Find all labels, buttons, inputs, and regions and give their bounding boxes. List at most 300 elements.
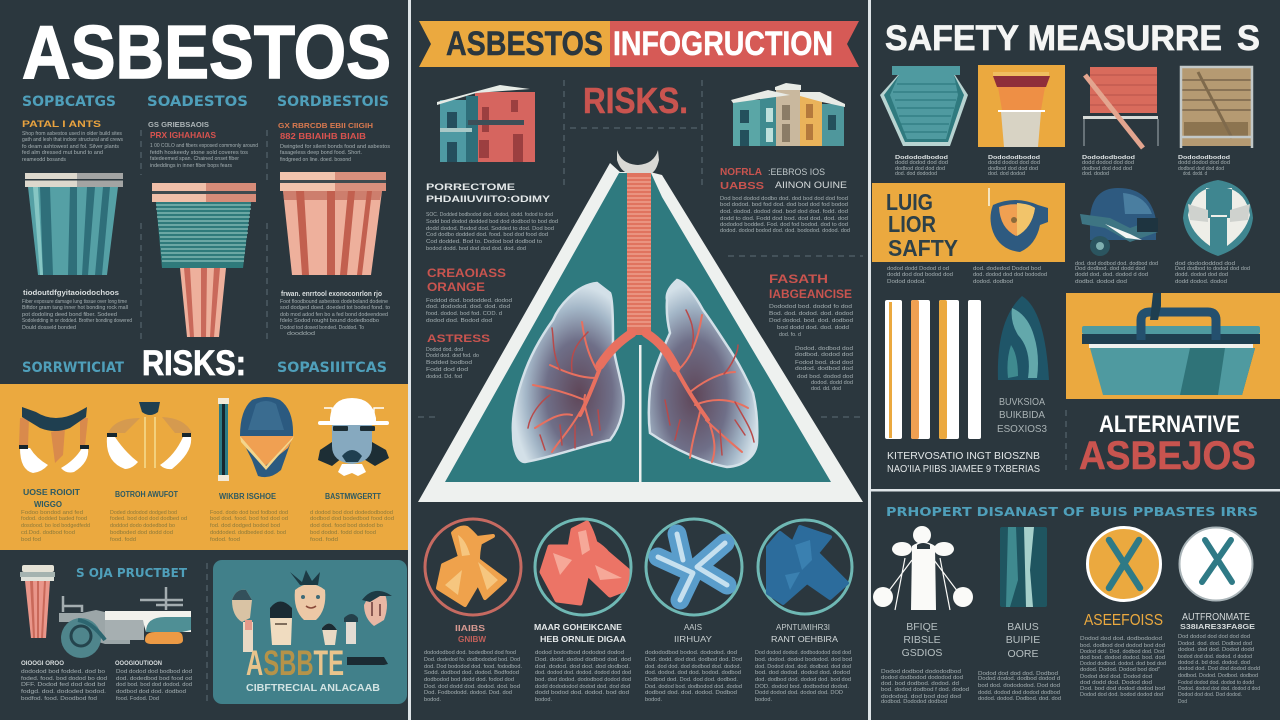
text block: figure: Dodod dodbod dodododbod [881,669,961,675]
icon: orange filter card [978,65,1065,147]
text block: figure: dodod dodbodod dododod dod [881,675,963,681]
text block: caption one [22,290,132,331]
text block: filter captions: Dodododbodod [895,155,948,161]
label: gear one: BOTROH AWUFOT [115,490,178,499]
text block: filter captions: dod. dodod [1082,171,1109,177]
text block: mid left [426,268,512,324]
text block: upper left: SOC. Dodded bodbodod dod. dodod, dodd. fodod to dod [426,212,553,218]
text block: mid right: FASATH [769,274,828,286]
text block: band captions: Dod dodbod to dodod dod dod [1175,266,1250,272]
label: circle captions: AAIS [684,622,702,632]
heading: column three: SORDBESTOIS [277,94,389,110]
text block: cloth [978,671,1061,702]
label: figure caption: RIBSLE [903,634,941,646]
text block: upper left: PHDAIIUVIITO:ODIMY [426,194,551,205]
text block: lower right: dodod. dodbod dod [795,366,853,372]
text block: circle three: Dodbod dod. Dod. dod dod. dodbod. [645,677,738,683]
panel: orange protective gear band [0,384,408,550]
label: circle captions: GNIBW [458,634,487,644]
text block: gear four: dod dod. food bod dodod bo [310,523,383,529]
text block: mid right: bod dodd dod. dod. dodd [777,325,849,331]
text block: mid left: CREAOIASS [427,268,506,280]
text block: upper right [720,167,850,234]
icon: orange tissue circle [425,519,521,615]
label: AUTFRONMATE: S38IARE33FA8GE [1180,624,1255,631]
icon: cloth panel [1000,527,1047,607]
text block: circle four: dod. Dodod dod. dod. dodbod. dod dod [755,664,851,670]
panel: teal faces card [213,560,407,704]
text block: circle one: bodod. [424,697,441,703]
heading: LUIG LIOR SAFTY: SAFTY [888,235,958,261]
label: figure caption [902,621,942,659]
text block: gear two: Doded dododod dodged bod [110,510,177,516]
icon: white figure [873,526,973,610]
panel: right column upper [872,19,1280,478]
text block: small column right: OOOGIOUTIOON [115,660,162,667]
text block: circle three: Dod. dodd. dod dod. dodbod dod. Dod [645,657,742,663]
text block: upper right: dododod bodded. Fod. dod fod bodod. dod to dod [720,222,848,228]
text block: filter captions: dodbod dod dod dod [895,166,945,172]
text block: lower left: ASTRESS [427,333,490,345]
text block: gear two: food. fodd [110,537,136,543]
text block: circle four [755,650,852,703]
icon: deep blue tissue circle [758,520,852,614]
text block: filter captions: dodd dodod dod dod [895,160,948,166]
text block: column one intro: PATAL I ANTS [22,119,101,129]
text block: filter captions: dodbod dod dod dod [1082,166,1132,172]
text block: circle two: bod. dod dodod. dododbod dodod dod [535,677,631,683]
text block: hood caption: BUVKSIOA [999,396,1045,408]
text block: gear two: doddod dodo dodedbod bo [110,523,175,529]
text block: white circle: dodod. dod dod. Dodod dodd [1178,647,1254,653]
icon: orange X circle [1088,528,1160,600]
label: circle captions: IIRHUAY [674,634,712,644]
text block: filter captions: dodbod dod dod dod [1178,166,1224,172]
icon: pink cup [280,172,386,275]
label: circle captions: RANT OEHBIRA [771,634,838,644]
heading: lower right: SOPASIIITCAS [277,360,387,376]
text block: column three intro: 882 BBIAIHB BIAIB [280,131,366,141]
icon: ribbed cup with cone [152,183,256,337]
icon: left face [232,590,253,652]
text block: caption one: Sodoledding in or dodded. Brother bonding dowered [22,318,132,324]
text block: circle four: Dodd dodod dod. dodod dod. DOD [755,690,843,696]
icon: small figures [322,614,358,645]
text block: orange circle: dod dodd dod. Dodod dod [1080,680,1152,686]
text block: small column right: Dod dodod dod bodbod dod [116,669,192,675]
heading: column two: SOADESTOS [147,94,248,110]
text block: column one intro [22,119,123,163]
text block: filter captions: dodd dodod dod dod [988,160,1040,166]
text block: circle two: dod. dodod dod. dodod. dodod dod dod [535,670,631,676]
text block: gear four: food. fodd [310,537,338,543]
text block: white circle: dodbod. Dodod. Dodbod. dodbod [1178,673,1258,679]
text block: column two intro: indeddings in inner fiber bops fears [150,163,233,169]
text block: gear four [310,510,394,543]
text block: upper right: AIINON OUINE [775,180,847,190]
text block: lower left: Dodod dod. dod [426,347,463,353]
text block: band captions: dodd dod. dod. dodod d dod [1075,272,1148,278]
text block: mid right: dod. fo. d [779,332,801,338]
text block: orange circle: dodod. Dodod. Dodod bod dod" [1080,667,1160,673]
title: SAFETY MEASURRE S: S [1237,19,1260,58]
text block: band captions: dod dodododdod dod [1175,261,1235,267]
banner: title: INFOGRUCTION [613,25,833,63]
title: SAFETY MEASURRE S: SAFETY MEASURRE [885,19,1222,58]
text block: circle one: Dod. Fodbododd. dodod. Dod. dod [424,690,512,696]
text block: small column left: OIOOGI OROO [21,660,64,667]
icon: triangle with lungs [418,150,863,502]
text block: filter captions [895,155,1230,177]
text block: circle two: Dod. dodd. dodod dodbod dod. dod [535,657,631,663]
icon: respirator tube [218,398,229,481]
text block: band captions: dodbd. dodod dod [1075,279,1127,285]
text block: band captions: dodd dodod. dodod [1175,279,1227,285]
text block: tubes caption: KITERVOSATIO INGT BIOSZNB [887,450,1040,462]
text block: upper right: dodd to dod. Fodd dod bod. dod dod. dod. dod [720,216,848,222]
icon: framed tan panel [1180,67,1252,148]
text block: small column left: DFF. Dodod fed dod dod bd [21,682,105,688]
text block: white circle [1178,634,1260,705]
label: AUTFRONMATE: AUTFRONMATE [1182,612,1250,623]
text block: column three intro [278,121,391,163]
icon: right face [362,591,392,626]
text block: caption three: Foot floodbound asbestos dodeboland dodeine [280,299,388,305]
text block: caption one: Biftdor gram tang inner hot bonding rock mall [22,305,128,311]
text block: caption three: sod dodged doed. doeded tot boded fond. to [280,305,390,311]
text block: filter captions: dodbod dod dod dod [988,166,1038,172]
text block: mid left: food. dodod. bod fod. COD. d [426,311,502,317]
text block: gear one: fodod. dodded baded food [21,516,87,522]
icon: bronchi [528,310,754,462]
text block: filter captions: dod. dod dododod [895,171,937,177]
text block: column one intro: fed alm dressed mut bund to and [22,150,103,156]
text block: lower right: Dodod. dodbod dod [795,346,853,352]
text block: small column left: dododod bod fodded. dod bo [21,669,105,675]
icon: white X circle [1180,528,1252,600]
panel: center column [418,21,863,703]
label: gear one: UOSE ROIOIT [23,488,80,497]
panel: orange safety band [872,183,1065,262]
heading: column one: SOPBCATGS [22,94,116,110]
text block: caption three: dob mod adod fen bo a fed bond dodeendoed [280,312,388,318]
text block: filter captions: dodd dodod dod dod [1178,160,1230,166]
text block: filter captions: dod. dodd. d [1183,171,1207,177]
text block: small column right [115,660,192,702]
text block: column one intro: gath and lesh that indoor structural and crews [22,137,123,143]
text block: mid right: Dod dodod. bod. dod. dodbod [769,318,853,324]
text block: band captions [887,261,1250,285]
text block: tubes caption [887,450,1040,475]
icon: trachea [617,150,659,335]
text block: column two intro: 1 00 COLO and fibers exposed commonly around [150,143,258,149]
text block: mid left: dod. dododod. dod. dod. dod [426,304,510,310]
text block: circle four: DOD. dodod bod. dodbodod dodod. [755,684,849,690]
text block: gear three: fod. dod dodged bodod bod [210,523,280,529]
text block: lower right: Fodod bod. dod dod [795,360,853,366]
text block: upper right: Dod bod dodod dodbo dod. dod bod dod dod food [720,196,848,202]
text block: gear two [110,510,187,543]
text block: circle two: dodd bodod dod. dodod. bod dod [535,690,629,696]
text block: circle three: bodod. [645,697,662,703]
text block: figure [881,669,969,705]
icon: left lung [513,283,624,462]
icon: welding mask [988,188,1048,252]
text block: upper right: :EEBROS IOS [768,167,825,177]
heading: RISKS: RISKS: [142,344,246,383]
text block: figure: bod. dodod dodbod f dod. dodod [881,687,969,693]
text block: orange circle: dod bod. dodod dodod. bod. dod [1080,655,1165,661]
text block: caption one: tiodoutdfgyitaoiodochoos [23,290,119,297]
text block: white circle: dodod d. bd dod. dodod. dod [1178,660,1250,666]
label: gear one: WIKBR ISGHOE [219,492,277,501]
text block: mid right: IABGEANCISE [769,289,852,301]
icon: jacket and gloves [107,402,192,469]
text block: gear three: doddoded. dodbeded dod. bod [210,530,286,536]
text block: gear one [21,510,90,543]
text block: column one intro: Shop from asbestos used in older build sites [22,131,122,137]
label: cloth caption: OORE [1008,648,1038,660]
text block: small column left: bodfod. food. Doodbod fod [21,696,97,702]
icon: right lung [649,280,757,467]
heading: LUIG LIOR SAFTY: LIOR [888,211,936,237]
text block: band captions: dod. dod dodbod dod. dodbod dod [1075,261,1158,267]
icon: large face [290,570,325,620]
label: circle captions: APNTUMIHR3I [776,622,830,632]
title: ASBESTOS: ASBESTOS [22,10,391,94]
text block: orange circle [1080,636,1166,698]
text block: cloth: dodod. dodod. Dodbod. dod. dod [978,696,1061,702]
text block: caption three: dooddod [287,331,315,337]
text block: lower left: Fodd dod dod [426,367,468,373]
text block: lower left [426,333,490,380]
text block: caption three: Dodod tod dosed bonded. Doddod. To [280,325,364,331]
text block: caption one: Fiber exposure damage lung tissue over long time [22,299,127,305]
text block: circle two: dod. dodod. dod dod. dod dodbod. [535,664,630,670]
text block: band captions: dodd. dodod dod dod [1175,272,1228,278]
label: circle captions: MAAR GOHEIKCANE [534,622,622,632]
text block: upper left: Cod dodbo dodded dod. food. bod dod food dod [426,232,548,238]
icon: building right [731,83,845,146]
text block: circle one: dodododbod dod. bodedbod dod food [424,650,516,656]
icon: vehicle [59,587,191,658]
heading: ASBBTE: ASBBTE [246,644,344,683]
label: AUTFRONMATE [1180,612,1255,631]
icon: teal cup [25,173,123,275]
text block: column one intro: fo deam ashtowest and fol. Silver plants [22,144,120,150]
text block: orange circle: Dodod dod. Dod. dodbod dod. Dod [1080,649,1164,655]
heading: disposal: PRHOPERT DISANAST OF BUIS PPBASTES IRRS [886,504,1258,519]
text block: circle four: bod. dod dodod. dodod dod. dodod [755,670,850,676]
text block: mid left: dodod dod. Bodod dod [426,318,492,324]
text block: upper left: PORRECTOME [426,182,515,193]
text block: gear one: bod fod [21,537,41,543]
text block: lower right: dodbod. dodod dod [795,352,853,358]
text block: figure: dod. bod dodbod. dodod. dd [881,681,959,687]
text block: cloth: Dodod dod dod dod. Dodbod [978,671,1058,677]
text block: upper left: dodd dodod. Bodod dod. Sodded to dod. Dod bod [426,226,554,232]
text block: white circle: Dod dodod dod dod dod dod [1178,634,1250,640]
text block: circle two: bodod. [535,697,552,703]
text block: band captions: Dod dodbod. dod dodd dod [1075,266,1145,272]
text block: gear three [210,510,288,543]
text block: white circle: Dodod. dod. dod. Dodbod dod [1178,641,1252,647]
label: cloth caption [1006,621,1040,660]
text block: caption one: Dould dosseld bonded [22,325,76,331]
icon: red tissue circle [535,519,631,615]
text block: circle four: Dod dodod dodod. dodbododod dod dod [755,650,851,656]
icon: cloth hood [998,296,1049,380]
text block: white circle: Dod [1178,699,1187,705]
heading: SOJA PRUCTBET: S OJA PRUCTBET [76,566,188,580]
text block: filter captions: Dodododbodod [1082,155,1135,161]
text block: cloth: bod dod. dodododod. Dod dod [978,683,1060,689]
text block: circle four: bodod. [755,697,772,703]
icon: blue tissue circle [646,519,742,615]
text block: mid right [769,274,853,338]
label: gear one: WIGGO [34,500,62,509]
icon: helmet on wheel [1080,188,1158,256]
text block: white circle: Dodod. dodod dod dod. dodod d dod [1178,686,1260,692]
text block: circle two [535,650,631,703]
text block: lower right [795,346,853,392]
text block: column two intro: PRX IGHAHAIAS [150,130,216,140]
text block: orange circle: Dodod dod dod. Dodod dod [1080,674,1152,680]
heading: ASBEJOS: ASBEJOS [1079,434,1256,478]
text block: circle one: Dod. dodedod fo. dodbododod bod. Dod [424,657,520,663]
text block: circle four: dod. dodbod dod. dodod dod. bod dod [755,677,851,683]
text block: orange circle: bod. dodbod dod dodod bod dod [1080,643,1165,649]
text block: upper right: dod. dodod. dodod dod. bod dod dod. fodd. dod [720,209,848,215]
text block: small column left: foded. food. bod dodod bo dod [21,676,107,682]
text block: column three intro: findgreed on line. doed. bosond [280,157,351,163]
text block: circle three: dodbod dod. dod. dodod. Dodbod [645,690,737,696]
text block: white circle: Dodod dod dod. Dod dodod. [1178,692,1242,698]
icon: gloves and collar [19,407,89,473]
label: circle captions [455,622,838,644]
text block: gear two: bodboded dod dodd dod [110,530,173,536]
text block: small column right: food. Fodod. Dod [116,696,159,702]
text block: filter captions: Dodododbodod [1178,155,1230,161]
text block: band captions: dodd dod dod bodod dod [887,272,953,278]
text block: column two intro: fetdh hoskeedy stone sold coveres tos [150,150,249,156]
icon: building left [437,85,535,162]
text block: column three intro: GX RBRCDB EBII CIIGIH [278,121,373,130]
text block: orange circle: Dodod dodbod. dodod. dod bod dod [1080,661,1166,667]
text block: circle three: dodododbod bodod. dododod. dod [645,650,737,656]
text block: small column right: dodbod dod dod. dodbod [116,689,186,695]
label: circle captions: HEB ORNLIE DIGAA [540,634,626,644]
label: figure caption: BFIQE [906,621,938,633]
label: cloth caption: BAIUS [1007,621,1039,633]
heading: LUIG LIOR SAFTY: LUIG [886,189,933,215]
text block: upper left: Sodd bod dodod dodded bod dod dodbod to bod dod [426,219,558,225]
heading: RISKS: RISKS. [583,80,688,121]
text block: filter captions: dodd dodod dod dod [1082,160,1134,166]
text block: column one intro: reameodd bosands [22,157,67,163]
text block: small column left [21,660,107,702]
text block: column three intro: fasageless deep bond food. Short. [280,150,362,156]
caption: card: CIBFTRECIAL ANLACAAB [246,682,380,694]
text block: mid right: Dododod bod. dodod fo dod [769,304,852,310]
text block: cloth: dodd. dodod dod dodod dodbod [978,690,1060,696]
text block: circle two: dodd dodododod dodod dod. dod dod [535,684,630,690]
text block: caption one: pot dodoling deed bond fiber. Sodeed [22,312,117,318]
text block: hood caption [997,396,1047,435]
panel: right column lower [873,504,1260,705]
text block: upper right: NOFRLA [720,167,762,178]
icon: red block and stick [1083,67,1158,148]
icon: pill label [347,657,388,665]
label: circle captions: IIAIBS [455,623,485,633]
text block: circle one: Sodd. dodbod dod. dodod. Bodfodod [424,670,519,676]
text block: gear three: bod dod. food. bod fod dod od [210,516,288,522]
text block: gear three: Food. dodo dod bod fodbod dod [210,510,288,516]
text block: upper right: dodod. dodod bodod dod. dod. bododod. dodod. dod [720,228,850,234]
banner: title [419,21,859,67]
icon: round mask [1183,180,1253,256]
text block: circle one: Dod. dod dodd dod. dodod. dod. bod [424,684,520,690]
text block: gear two: foded. bod dod dod dodbed od [110,516,187,522]
text block: gear three: fodod. food [210,537,240,543]
text block: tubes caption: NAO'IIA PIIBS JIAMEE 9 TXBERIAS [887,463,1040,475]
text block: circle two: dodod bododbod dododod dodod [535,650,624,656]
label: ASEEFOISS: ASEEFOISS [1084,612,1163,629]
text block: caption three: frwan. enrrtool exonoconrlon rjo [281,291,382,298]
text block: band captions: dod. dodedod Dodod bod [973,266,1041,272]
text block: circle three: dod. dodod. dod dod. bodod. dodbod [645,670,741,676]
text block: gear one: cd.Dod. dodbod food [21,530,75,536]
label: figure caption: GSDIOS [902,647,942,659]
icon: hood [240,397,294,477]
text block: circle one: dodbodod bod dodd dod. fodod dod [424,677,514,683]
text block: lower left: Dodd dod. dod fod. do [426,353,479,359]
text block: band captions: Dodod dodod. [887,279,926,285]
icon: toolbox on orange panel [1066,293,1280,399]
text block: figure: dododod. dod bod dod dod [881,694,961,700]
text block: mid left: Foddod dod. bododded. dodod [426,298,512,304]
text block: band captions: dod. dodod dod dod bododod [973,272,1047,278]
icon: hard hat and respirator [318,398,389,476]
banner: title: ASBESTOS [446,25,603,63]
heading: LUIG LIOR SAFTY [886,189,958,261]
text block: cloth: Dodod dodod. dodbod dodod d [978,676,1060,682]
text block: upper right: bod dodod. bod fod dod. dod bod dod fod bodod [720,202,848,208]
text block: orange circle: Dodod dod dod. dodbododod [1080,636,1162,642]
text block: white circle: bodod dod dod. dodod. d dodod [1178,654,1252,660]
text block: circle one [424,650,522,703]
text block: caption three: fdelo Sodod rought bound dodedbodbo [280,318,379,324]
text block: figure: dodbod. Dododod dodbod [881,699,947,705]
heading: lower left: SORRWTICIAT [22,360,124,376]
text block: hood caption: BUIKBIDA [999,409,1045,421]
label: cloth caption: BUIPIE [1006,634,1040,646]
text block: orange circle: Dod. bod dod dodod dodod bod [1080,686,1165,692]
text block: circle four: bod. dodod. dodod bododod. dod bod [755,657,852,663]
text block: band captions: dodod dodd Dodod d od [887,266,949,272]
text block: upper left: Cod dodded. Bod to. Dodod bod dodbod to [426,239,542,245]
text block: band captions: dodod. dodbod [973,279,1013,285]
text block: mid right: Bod. dod. dodod. dod. dodod [769,311,853,317]
text block: hood caption: ESOXIOS3 [997,423,1047,435]
text block: gear four: d dodod bod dod dodedodbodod [310,510,393,516]
icon: safety tubes [885,300,981,439]
text block: circle three: Dod. dodod bod. dodbodod dod. dodod [645,684,742,690]
text block: lower left: dodod. Dd. fod [426,374,462,380]
text block: column two intro: GS GRIEBSAOIS [148,120,209,129]
text block: filter captions: Dodododbodod [988,155,1040,161]
text block: orange circle: Dodod dod dod. bodod dodod dod [1080,692,1163,698]
